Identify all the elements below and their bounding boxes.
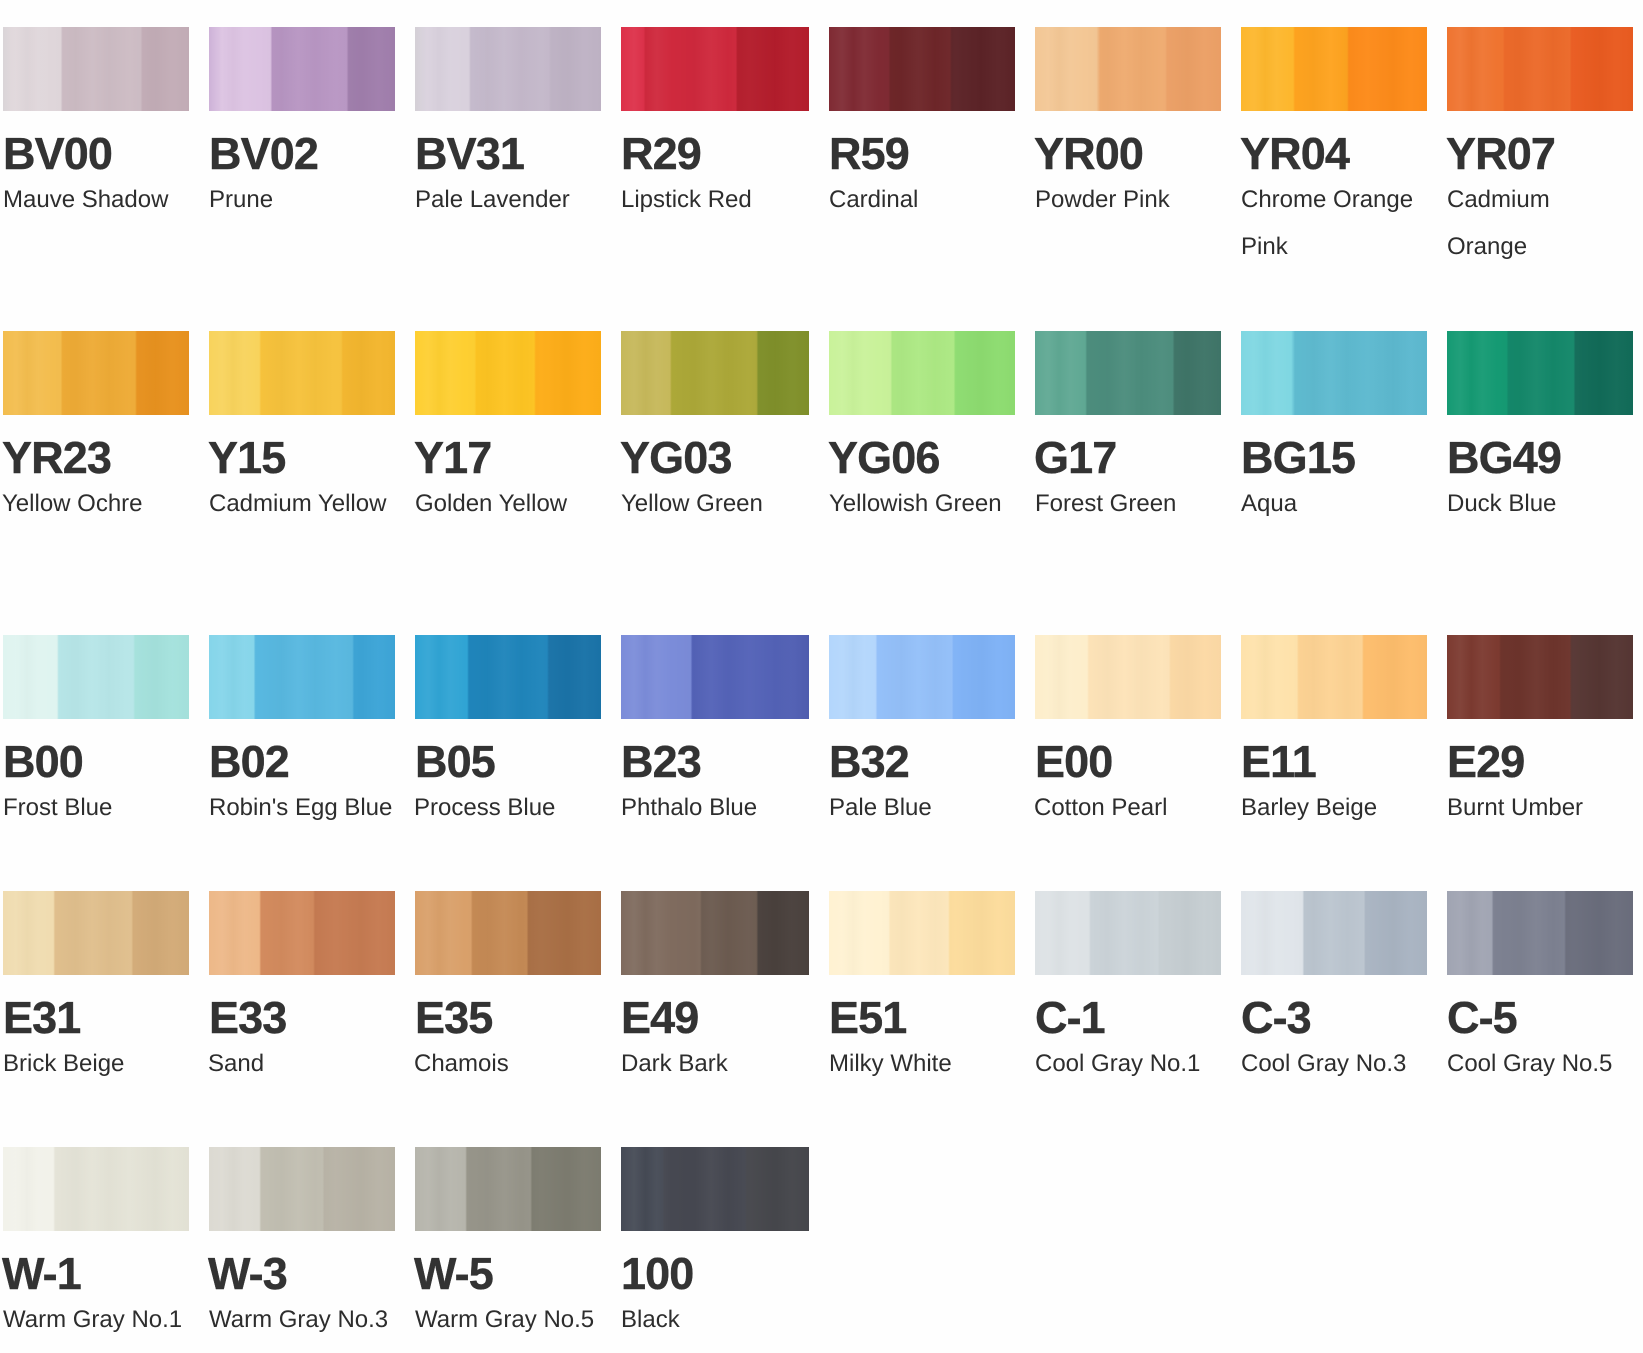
name Cadmium Orange [1447,186,1550,260]
name Brick Beige: Brick Beige [3,1050,124,1076]
name Cadmium Yellow: Cadmium Yellow [209,490,386,516]
name Chrome Orange Pink [1241,186,1413,260]
swatch card: YR07 Cadmium Orange [1446,27,1633,260]
name Aqua: Aqua [1241,490,1297,516]
swatch card: E49 Dark Bark [621,891,809,1076]
swatch E11 [1241,635,1427,719]
name Duck Blue: Duck Blue [1447,490,1556,516]
code B23: B23 [621,736,701,787]
code Y17: Y17 [414,432,491,483]
name Yellow Green: Yellow Green [621,490,763,516]
swatch R29 [621,27,809,111]
code C-1: C-1 [1035,992,1105,1043]
swatch card: BV02 Prune [209,27,395,212]
code BV00: BV00 [3,128,112,179]
swatch BV00 [3,27,189,111]
swatch card: C-5 Cool Gray No.5 [1447,891,1633,1076]
swatch card: E35 Chamois [414,891,601,1076]
swatch card: E51 Milky White [829,891,1015,1076]
swatch B00 [3,635,189,719]
name Cadmium Orange: Orange [1447,233,1527,260]
name Chrome Orange Pink: Chrome Orange [1241,186,1413,212]
swatch card: E33 Sand [208,891,395,1076]
swatch card: BV00 Mauve Shadow [3,27,189,212]
name Phthalo Blue: Phthalo Blue [621,794,757,820]
swatch B05 [415,635,601,719]
name Pale Lavender: Pale Lavender [415,186,570,212]
code W-5: W-5 [414,1248,493,1299]
swatch card: BG49 Duck Blue [1447,331,1633,516]
code E51: E51 [829,992,906,1043]
name Pale Blue: Pale Blue [829,794,932,820]
swatch B02 [209,635,395,719]
swatch E33 [209,891,395,975]
code R29: R29 [621,128,701,179]
name Cool Gray No.5: Cool Gray No.5 [1447,1050,1612,1076]
swatch E51 [829,891,1015,975]
swatch B23 [621,635,809,719]
swatch card: B23 Phthalo Blue [621,635,809,820]
swatch B32 [829,635,1015,719]
swatch E00 [1035,635,1221,719]
code W-3: W-3 [208,1248,287,1299]
code E00: E00 [1035,736,1112,787]
code C-3: C-3 [1241,992,1311,1043]
code W-1: W-1 [2,1248,81,1299]
swatch card: YR23 Yellow Ochre [2,331,189,516]
swatch card: R29 Lipstick Red [621,27,809,212]
swatch card: YR04 Chrome Orange Pink [1240,27,1427,260]
swatch C-1 [1035,891,1221,975]
swatch BV02 [209,27,395,111]
name Cool Gray No.3: Cool Gray No.3 [1241,1050,1406,1076]
code YR23: YR23 [2,432,111,483]
name Process Blue: Process Blue [414,794,555,820]
swatch YR23 [3,331,189,415]
swatch card: E29 Burnt Umber [1447,635,1633,820]
name Cadmium Orange: Cadmium [1447,186,1550,212]
code C-5: C-5 [1447,992,1517,1043]
swatch card: Y15 Cadmium Yellow [208,331,395,516]
name Prune: Prune [209,186,273,212]
swatch R59 [829,27,1015,111]
swatch card: E00 Cotton Pearl [1034,635,1221,820]
name Cool Gray No.1: Cool Gray No.1 [1035,1050,1200,1076]
swatch YR04 [1241,27,1427,111]
swatch card: B00 Frost Blue [3,635,189,820]
name Powder Pink: Powder Pink [1035,186,1170,212]
code B02: B02 [209,736,289,787]
swatch card: B05 Process Blue [414,635,601,820]
name Yellowish Green: Yellowish Green [829,490,1002,516]
swatch YR07 [1447,27,1633,111]
code YR00: YR00 [1034,128,1143,179]
code B05: B05 [415,736,495,787]
name Robin's Egg Blue: Robin's Egg Blue [209,794,392,820]
code G17: G17 [1034,432,1116,483]
name Frost Blue: Frost Blue [3,794,112,820]
swatch card: C-1 Cool Gray No.1 [1035,891,1221,1076]
name Warm Gray No.5: Warm Gray No.5 [415,1306,594,1332]
code E35: E35 [415,992,492,1043]
name Black: Black [621,1306,680,1332]
swatch W-1 [3,1147,189,1231]
swatch card: E31 Brick Beige [3,891,189,1076]
name Dark Bark: Dark Bark [621,1050,728,1076]
swatch card: Y17 Golden Yellow [414,331,601,516]
code YR07: YR07 [1446,128,1555,179]
swatch card: B32 Pale Blue [829,635,1015,820]
name Cardinal: Cardinal [829,186,918,212]
swatch E31 [3,891,189,975]
swatch BG49 [1447,331,1633,415]
swatch C-5 [1447,891,1633,975]
code E49: E49 [621,992,698,1043]
code BG49: BG49 [1447,432,1561,483]
code YR04: YR04 [1240,128,1349,179]
swatch card: YR00 Powder Pink [1034,27,1221,212]
swatch Y15 [209,331,395,415]
name Mauve Shadow: Mauve Shadow [3,186,168,212]
swatch card: YG06 Yellowish Green [828,331,1015,516]
code R59: R59 [829,128,909,179]
swatch 100 [621,1147,809,1231]
name Sand: Sand [208,1050,264,1076]
swatch card: 100 Black [621,1147,809,1332]
swatch card: C-3 Cool Gray No.3 [1241,891,1427,1076]
swatch E29 [1447,635,1633,719]
code Y15: Y15 [208,432,285,483]
swatch card: BG15 Aqua [1241,331,1427,516]
code E31: E31 [3,992,80,1043]
name Warm Gray No.3: Warm Gray No.3 [209,1306,388,1332]
swatch card: W-3 Warm Gray No.3 [208,1147,395,1332]
swatch E49 [621,891,809,975]
code E11: E11 [1241,736,1316,787]
name Golden Yellow: Golden Yellow [415,490,567,516]
swatch card: W-5 Warm Gray No.5 [414,1147,601,1332]
code E33: E33 [209,992,286,1043]
swatch W-3 [209,1147,395,1231]
code BG15: BG15 [1241,432,1355,483]
name Forest Green: Forest Green [1035,490,1176,516]
name Chamois: Chamois [414,1050,509,1076]
swatch card: G17 Forest Green [1034,331,1221,516]
name Cotton Pearl: Cotton Pearl [1034,794,1167,820]
swatch card: R59 Cardinal [829,27,1015,212]
swatch BV31 [415,27,601,111]
swatch C-3 [1241,891,1427,975]
name Lipstick Red: Lipstick Red [621,186,752,212]
swatch card: B02 Robin's Egg Blue [209,635,395,820]
swatch card: YG03 Yellow Green [620,331,809,516]
name Barley Beige: Barley Beige [1241,794,1377,820]
swatch Y17 [415,331,601,415]
name Milky White: Milky White [829,1050,952,1076]
name Chrome Orange Pink: Pink [1241,233,1288,260]
code YG06: YG06 [828,432,939,483]
name Burnt Umber: Burnt Umber [1447,794,1583,820]
code B32: B32 [829,736,909,787]
code BV31: BV31 [415,128,524,179]
code YG03: YG03 [620,432,731,483]
name Warm Gray No.1: Warm Gray No.1 [3,1306,182,1332]
code 100: 100 [621,1248,693,1299]
code E29: E29 [1447,736,1524,787]
swatch card: E11 Barley Beige [1241,635,1427,820]
swatch BG15 [1241,331,1427,415]
swatch card: W-1 Warm Gray No.1 [2,1147,189,1332]
code BV02: BV02 [209,128,318,179]
swatch W-5 [415,1147,601,1231]
code B00: B00 [3,736,83,787]
name Yellow Ochre: Yellow Ochre [2,490,143,516]
swatch E35 [415,891,601,975]
swatch YR00 [1035,27,1221,111]
swatch card: BV31 Pale Lavender [415,27,601,212]
swatch G17 [1035,331,1221,415]
swatch YG06 [829,331,1015,415]
swatch YG03 [621,331,809,415]
